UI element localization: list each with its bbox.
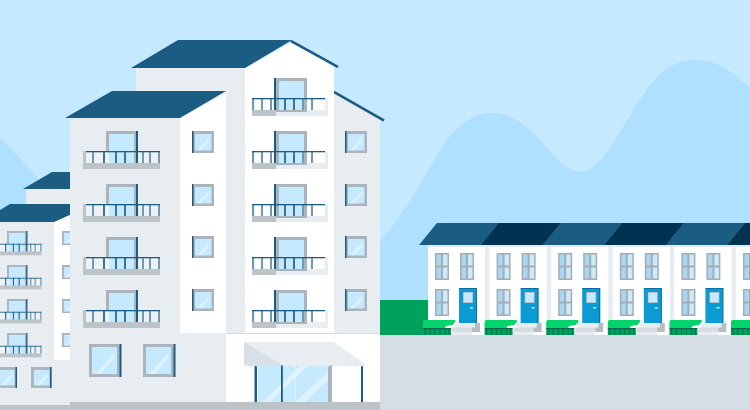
main apartment block [65, 40, 384, 404]
gabled white front [245, 42, 334, 334]
terraced houses row [419, 223, 750, 335]
rear roof [23, 172, 72, 189]
roof segment 4 [604, 223, 684, 245]
house 2 [485, 245, 552, 335]
awning [244, 342, 366, 366]
far left apartment block [0, 172, 76, 408]
roof segment 5 [666, 223, 745, 245]
back tower wall [136, 68, 245, 334]
pavement strip [0, 402, 380, 410]
ground [380, 335, 750, 410]
house 3 [546, 245, 613, 335]
right wing wall [334, 92, 380, 334]
shop front glass [254, 364, 363, 403]
balconies [0, 231, 42, 357]
roof segment 6 [727, 223, 750, 245]
lower ground wall [180, 333, 226, 404]
gable roof line [291, 41, 338, 67]
white ground floor [226, 334, 380, 404]
roof segment 3 [543, 223, 622, 245]
white tower balconies [252, 78, 328, 328]
grey balconies [83, 131, 160, 328]
roof segment 1 [419, 223, 500, 245]
white side wall [54, 214, 72, 360]
house 1 [423, 245, 490, 335]
left hill [0, 138, 70, 300]
roof segment 2 [481, 223, 561, 245]
roof [0, 204, 72, 222]
front side windows [192, 131, 214, 311]
house 5 [669, 245, 736, 335]
rear wall [26, 189, 76, 219]
house 6 [731, 245, 750, 335]
ground floor windows [89, 344, 176, 377]
right wing roof line [334, 92, 384, 120]
lower windows [0, 367, 52, 388]
upper roof [131, 40, 292, 68]
house 4 [608, 245, 675, 335]
front roof [65, 91, 226, 118]
green hedge block [380, 300, 430, 335]
front side wall [180, 93, 226, 334]
main wall [0, 222, 72, 408]
front left wall [70, 118, 181, 404]
side windows [62, 231, 76, 347]
right hills [380, 60, 750, 336]
right wing windows [345, 131, 367, 311]
